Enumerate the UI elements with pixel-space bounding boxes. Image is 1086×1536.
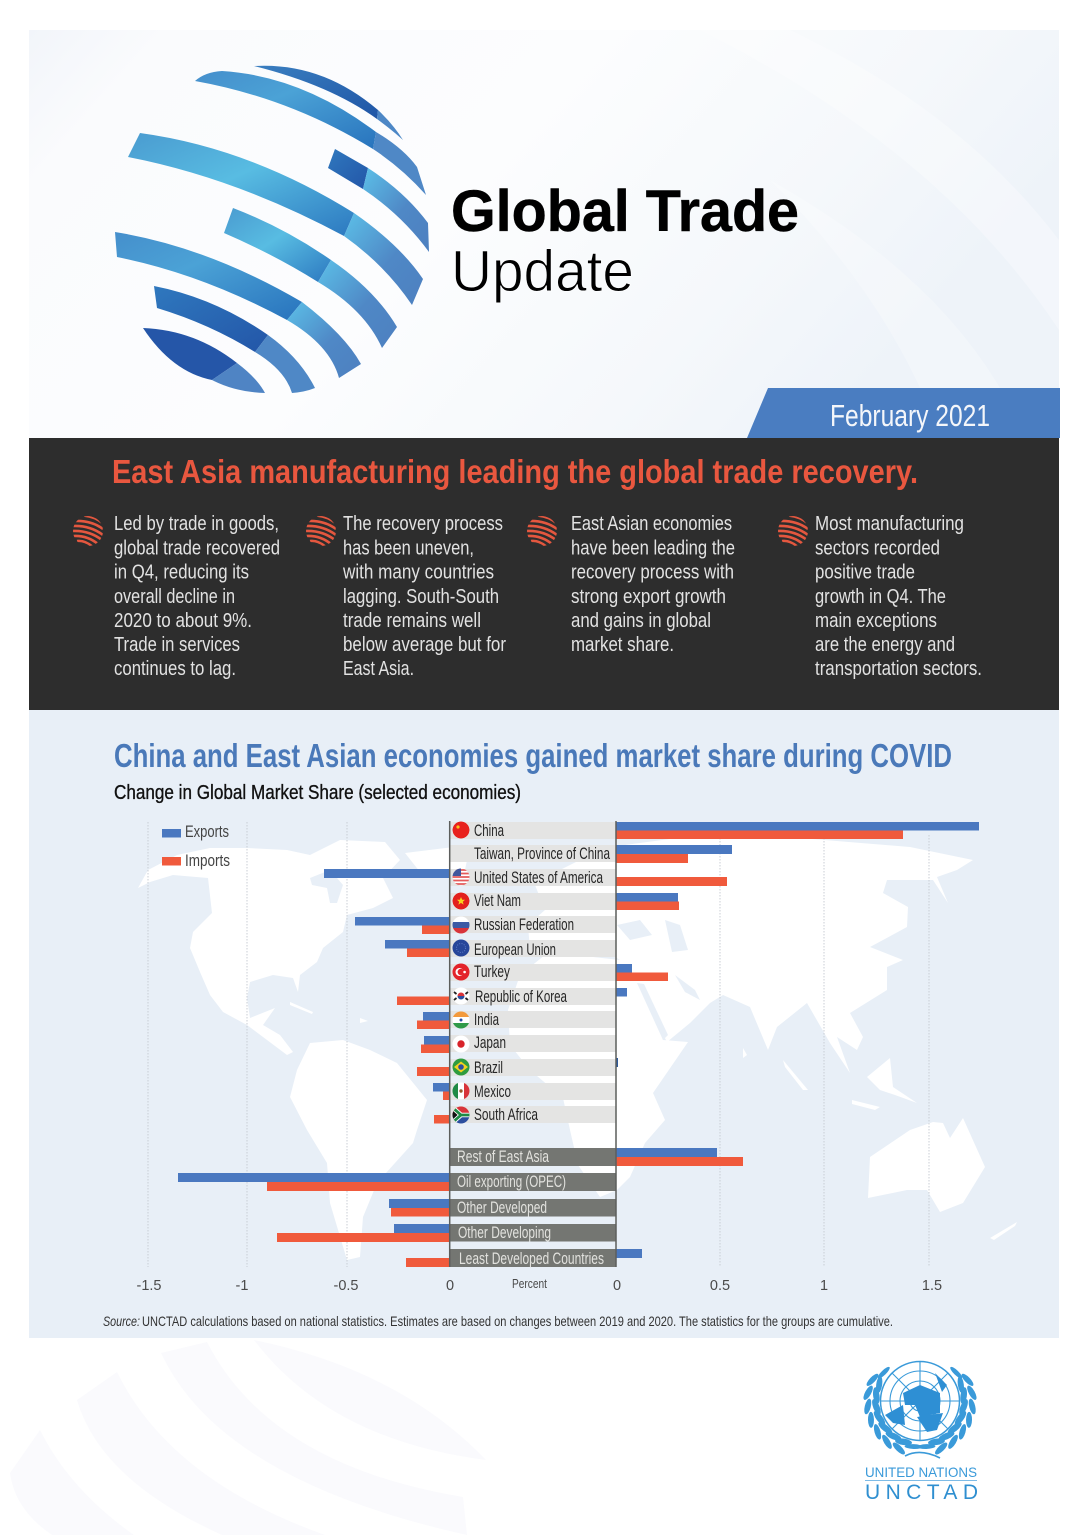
text: column 2: lagging. South-South: [343, 586, 499, 608]
text: column 1: in Q4, reducing its: [114, 562, 249, 584]
date tab: [747, 388, 1060, 438]
row: Brazil: Brazil: [474, 1059, 503, 1077]
text: column 3: strong export growth: [571, 586, 726, 608]
logo: UNCTAD: [862, 1361, 978, 1504]
title: [451, 179, 799, 304]
row: Mexico: [433, 1082, 616, 1101]
row: Taiwan: Taiwan, Province of China: [474, 845, 611, 863]
axis labels: -1: [236, 1278, 248, 1294]
icon: bullet 2: [305, 516, 336, 547]
text: column 4: [815, 513, 982, 680]
row: India: [417, 1011, 616, 1029]
axis labels: Percent: [512, 1277, 547, 1291]
row: Japan: [421, 1034, 616, 1053]
row: South Africa: [434, 1106, 616, 1124]
axis labels: 0: [613, 1278, 621, 1294]
axis labels: 1.5: [922, 1278, 942, 1294]
text: column 4: are the energy and: [815, 634, 955, 656]
row: Japan: Japan: [474, 1034, 506, 1052]
row: China: [450, 822, 979, 840]
axis labels: -1.5: [136, 1278, 162, 1294]
axis labels: 0.5: [710, 1278, 730, 1294]
panel: dark key messages: [29, 438, 1059, 710]
text: column 1: continues to lag.: [114, 658, 236, 680]
flag: Mexico: [452, 1082, 470, 1100]
icon: bullet 1: [72, 516, 103, 547]
row: Least Developed Countries: [406, 1249, 642, 1268]
axis labels: 1: [820, 1278, 828, 1294]
text: column 1: Trade in services: [114, 634, 240, 656]
row: United States: [324, 868, 727, 887]
row: Other Developed: Other Developed: [457, 1199, 547, 1217]
row: Oil exporting: [178, 1173, 616, 1191]
text: column 2: [342, 513, 506, 680]
row: Rest of East Asia: [450, 1148, 743, 1166]
panel: header: [29, 30, 1060, 438]
row: Turkey: [450, 963, 668, 981]
text: column 3: and gains in global: [571, 610, 711, 632]
flag: Korea: [452, 988, 470, 1004]
flag: Russia: [452, 916, 470, 934]
text: column 2: East Asia.: [343, 658, 414, 680]
text: column 4: growth in Q4. The: [815, 586, 946, 608]
icon: striped globe: [115, 66, 429, 393]
flag: Brazil: [452, 1058, 470, 1076]
world map background: [138, 835, 1017, 1260]
row: Russian Federation: [355, 916, 616, 934]
row: Other Developed: [389, 1199, 616, 1217]
text: column 1: 2020 to about 9%.: [114, 610, 252, 632]
flag: Japan: [452, 1036, 470, 1052]
heading: key message: East Asia manufacturing leading the global trade recovery.: [112, 453, 918, 490]
row: Republic of Korea: Republic of Korea: [475, 988, 568, 1006]
text: column 2: has been uneven,: [343, 538, 474, 560]
title: Update: [451, 239, 634, 304]
row: European Union: European Union: [474, 941, 556, 959]
flag: Turkey: [452, 964, 470, 980]
map seas and lakes: [310, 870, 700, 1040]
legend: Exports: [185, 823, 229, 841]
text: column 2: trade remains well: [343, 610, 481, 632]
row: European Union: [385, 940, 616, 959]
row: Viet Nam: [450, 892, 679, 910]
chart axes: [450, 821, 616, 1267]
row: Republic of Korea: [397, 988, 627, 1006]
row: Oil exporting: Oil exporting (OPEC): [457, 1173, 566, 1191]
row: India: India: [474, 1011, 500, 1029]
logo: UNCTAD: UNCTAD: [865, 1481, 978, 1504]
text: column 1: overall decline in: [114, 586, 235, 608]
text: column 4: transportation sectors.: [815, 658, 982, 680]
row: Least Developed Countries: Least Developed Countries: [459, 1250, 604, 1268]
legend: Imports: [185, 852, 230, 870]
background swooshes: footer: [10, 1340, 486, 1535]
row: Turkey: Turkey: [474, 963, 511, 981]
text: column 4: Most manufacturing: [815, 513, 964, 535]
row: Russian Federation: Russian Federation: [474, 916, 574, 934]
row: China: China: [474, 822, 505, 840]
row: Other Developing: Other Developing: [458, 1224, 551, 1242]
flag: India: [452, 1012, 470, 1028]
row: Other Developing: [277, 1224, 616, 1242]
flag: China: [452, 822, 470, 838]
icon: bullet 3: [526, 516, 557, 547]
text: column 4: sectors recorded: [815, 538, 940, 560]
flag: EU: [452, 940, 470, 956]
flag: USA: [452, 868, 470, 886]
row: Rest of East Asia: Rest of East Asia: [457, 1148, 550, 1166]
logo: UNCTAD: UNITED NATIONS: [865, 1464, 977, 1480]
row: Brazil: [417, 1058, 618, 1077]
text: column 1: [114, 513, 280, 680]
text: column 3: have been leading the: [571, 538, 735, 560]
text: column 2: with many countries: [342, 562, 494, 584]
text: column 3: [571, 513, 735, 656]
text: column 2: below average but for: [343, 634, 506, 656]
flag: South Africa: [452, 1106, 470, 1124]
date tab: February 2021: [830, 398, 990, 433]
legend: [162, 823, 230, 870]
row: Taiwan: [450, 845, 732, 863]
text: column 4: main exceptions: [815, 610, 937, 632]
source note: Source:: [103, 1313, 140, 1329]
text: column 3: market share.: [571, 634, 674, 656]
text: column 3: East Asian economies: [571, 513, 732, 535]
row: Mexico: Mexico: [474, 1083, 511, 1101]
icon: bullet 4: [777, 516, 808, 547]
text: column 1: global trade recovered: [114, 538, 280, 560]
panel: market share chart: [29, 710, 1059, 1338]
flag: Viet Nam: [452, 892, 470, 910]
icon: UN emblem: [862, 1361, 978, 1458]
axis labels: 0: [446, 1278, 454, 1294]
text: column 2: The recovery process: [343, 513, 503, 535]
text: column 3: recovery process with: [571, 562, 734, 584]
row: Viet Nam: Viet Nam: [474, 892, 521, 910]
title: Global Trade: [451, 179, 799, 244]
row: United States: United States of America: [474, 869, 604, 887]
bar chart: [178, 822, 979, 1268]
text: column 1: Led by trade in goods,: [114, 513, 279, 535]
axis labels: -0.5: [334, 1278, 358, 1294]
subheading: Change in Global Market Share (selected economies): [114, 782, 521, 804]
source note: UNCTAD calculations based on national statistics. Estimates are based on changes between 2019 and 2020. The statistics for the groups are cumulative.: [142, 1313, 893, 1329]
gridlines: [148, 822, 929, 1267]
axis labels: [136, 1277, 942, 1294]
text: column 4: positive trade: [815, 562, 915, 584]
row: South Africa: South Africa: [474, 1106, 539, 1124]
